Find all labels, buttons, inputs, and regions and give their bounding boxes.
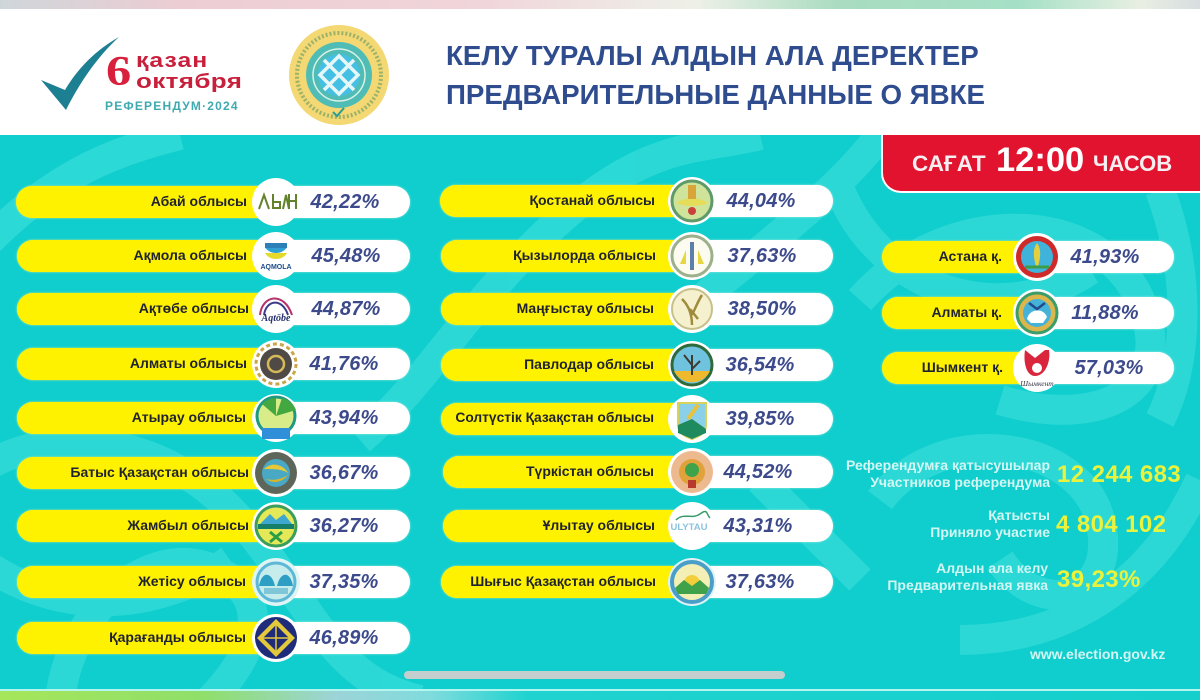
city row: Almaty <box>882 297 1174 329</box>
region row: Turkistan: 44,52% <box>723 461 793 483</box>
city row: Astana <box>882 241 1174 273</box>
region row: Ulytau: 43,31% <box>723 515 793 537</box>
city row: Astana: Астана қ. <box>939 248 1002 264</box>
icon: Mangystau <box>668 285 713 333</box>
time badge: ЧАСОВ <box>1093 151 1172 176</box>
region row: North Kazakhstan <box>441 403 833 435</box>
region row: Mangystau: Маңғыстау облысы <box>517 300 654 316</box>
header panel <box>0 9 1200 135</box>
city row: Shymkent: Шымкент қ. <box>922 359 1003 375</box>
region row: Pavlodar: Павлодар облысы <box>524 356 654 372</box>
region row: Akmola: Ақмола облысы <box>133 247 247 263</box>
icon: Almaty region <box>252 340 298 388</box>
region row: Aktobe <box>17 293 410 325</box>
region row: Kostanay: 44,04% <box>726 190 796 212</box>
time badge <box>881 135 1200 193</box>
region row: Atyrau: Атырау облысы <box>132 409 246 425</box>
icon: Akmola: AQMOLA <box>260 264 292 271</box>
logo date text: қазан <box>136 50 208 72</box>
region row: Karaganda <box>17 622 410 654</box>
region row: Zhetisu <box>17 566 410 598</box>
title: ПРЕДВАРИТЕЛЬНЫЕ ДАННЫЕ О ЯВКЕ <box>446 79 985 110</box>
city row: Astana: 41,93% <box>1070 246 1140 268</box>
title <box>446 40 985 110</box>
stat: preliminary turnout: 39,23% <box>1057 566 1141 593</box>
city row: Shymkent: 57,03% <box>1074 357 1144 379</box>
stat: took part <box>930 507 1166 540</box>
region row: Kostanay: Қостанай облысы <box>529 192 655 208</box>
title: КЕЛУ ТУРАЛЫ АЛДЫН АЛА ДЕРЕКТЕР <box>446 40 979 71</box>
region row: East Kazakhstan: 37,63% <box>725 571 795 593</box>
icon: Turkistan <box>668 448 713 496</box>
icon: West Kazakhstan <box>252 449 297 497</box>
city row: Almaty: Алматы қ. <box>931 304 1002 320</box>
stat: took part: 4 804 102 <box>1056 511 1166 538</box>
region row: Almaty region <box>17 348 410 380</box>
region row: Pavlodar: 36,54% <box>725 354 795 376</box>
icon: Akmola <box>252 232 294 280</box>
region row: Zhambyl: 36,27% <box>309 515 379 537</box>
region row: Ulytau <box>443 510 833 542</box>
icon: Zhambyl <box>252 502 298 550</box>
icon: election commission seal <box>289 25 389 125</box>
region row: Abai <box>16 186 410 218</box>
region row: Mangystau <box>441 293 833 325</box>
top colour strip <box>0 0 1200 9</box>
stat: referendum participants: Референдумға қатысушылар <box>846 457 1050 473</box>
region row: West Kazakhstan <box>17 457 410 489</box>
stat: referendum participants: Участников референдума <box>870 474 1050 490</box>
stat: took part: Приняло участие <box>930 524 1050 540</box>
region row: Kyzylorda: Қызылорда облысы <box>513 247 656 263</box>
logo date text: 6 <box>106 49 131 95</box>
time badge: 12:00 <box>996 141 1084 179</box>
region row: Pavlodar <box>441 349 833 381</box>
icon: Shymkent <box>1013 344 1055 392</box>
region row: West Kazakhstan: 36,67% <box>309 462 379 484</box>
region row: West Kazakhstan: Батыс Қазақстан облысы <box>70 464 249 480</box>
stat: preliminary turnout: Алдын ала келу <box>936 560 1048 576</box>
icon: East Kazakhstan <box>668 558 716 606</box>
region row: Akmola <box>17 240 410 272</box>
region row: Almaty region: Алматы облысы <box>130 355 247 371</box>
scrollbar <box>404 671 785 679</box>
region row: Abai: 42,22% <box>310 191 380 213</box>
icon: Pavlodar <box>668 341 714 389</box>
stat: took part: Қатысты <box>988 507 1050 523</box>
icon: Almaty <box>1013 289 1058 337</box>
time badge: САҒАТ <box>912 151 986 176</box>
region row: Zhambyl: Жамбыл облысы <box>127 517 249 533</box>
background swirls <box>0 135 1200 689</box>
icon: Aktobe <box>252 285 294 333</box>
region row: Ulytau: Ұлытау облысы <box>543 517 655 533</box>
website link text: www.election.gov.kz <box>1030 646 1165 662</box>
stat: preliminary turnout <box>887 560 1141 593</box>
region row: Kyzylorda <box>441 240 833 272</box>
region row: Turkistan <box>443 456 833 488</box>
logo date text: октября <box>136 71 242 93</box>
region row: Aktobe: 44,87% <box>311 298 381 320</box>
bottom colour strip <box>0 689 1200 700</box>
stat: referendum participants: 12 244 683 <box>1057 461 1181 488</box>
region row: North Kazakhstan: 39,85% <box>725 408 795 430</box>
region row: East Kazakhstan: Шығыс Қазақстан облысы <box>470 573 656 589</box>
region row: Abai: Абай облысы <box>151 193 247 209</box>
icon: North Kazakhstan <box>668 395 710 443</box>
icon: Aktobe: Aqtöbe <box>261 313 291 324</box>
stat: preliminary turnout: Предварительная явка <box>887 577 1048 593</box>
region row: Almaty region: 41,76% <box>309 353 379 375</box>
region row: Kyzylorda: 37,63% <box>727 245 797 267</box>
region row: North Kazakhstan: Солтүстік Қазақстан облысы <box>455 410 654 425</box>
icon: Karaganda <box>252 614 297 662</box>
region row: Atyrau: 43,94% <box>309 407 379 429</box>
icon: Shymkent: Шымкент <box>1019 379 1054 388</box>
icon: Zhetisu <box>252 558 300 606</box>
region row: Mangystau: 38,50% <box>727 298 797 320</box>
region row: Karaganda: Қарағанды облысы <box>109 629 246 645</box>
region row: Zhetisu: Жетісу облысы <box>138 573 246 589</box>
region row: Zhambyl <box>17 510 410 542</box>
city row: Almaty: 11,88% <box>1071 302 1139 324</box>
icon: Kyzylorda <box>668 232 714 280</box>
icon: Astana <box>1013 233 1058 281</box>
stat: referendum participants <box>846 457 1181 490</box>
region row: Turkistan: Түркістан облысы <box>526 463 654 479</box>
region row: Akmola: 45,48% <box>311 245 381 267</box>
icon: Atyrau <box>252 394 296 442</box>
city row: Shymkent <box>882 352 1174 384</box>
region row: Aktobe: Ақтөбе облысы <box>139 300 249 316</box>
icon: Ulytau <box>668 502 710 550</box>
icon: Kostanay <box>668 177 714 225</box>
logo date text: РЕФЕРЕНДУМ·2024 <box>105 99 239 113</box>
icon: Abai <box>252 178 297 226</box>
region row: East Kazakhstan <box>441 566 833 598</box>
region row: Kostanay <box>440 185 833 217</box>
logo date text <box>105 49 242 113</box>
icon: referendum check mark <box>41 37 119 110</box>
icon: Ulytau: ULYTAU <box>671 522 708 533</box>
region row: Karaganda: 46,89% <box>309 627 379 649</box>
region row: Atyrau <box>17 402 410 434</box>
region row: Zhetisu: 37,35% <box>309 571 379 593</box>
